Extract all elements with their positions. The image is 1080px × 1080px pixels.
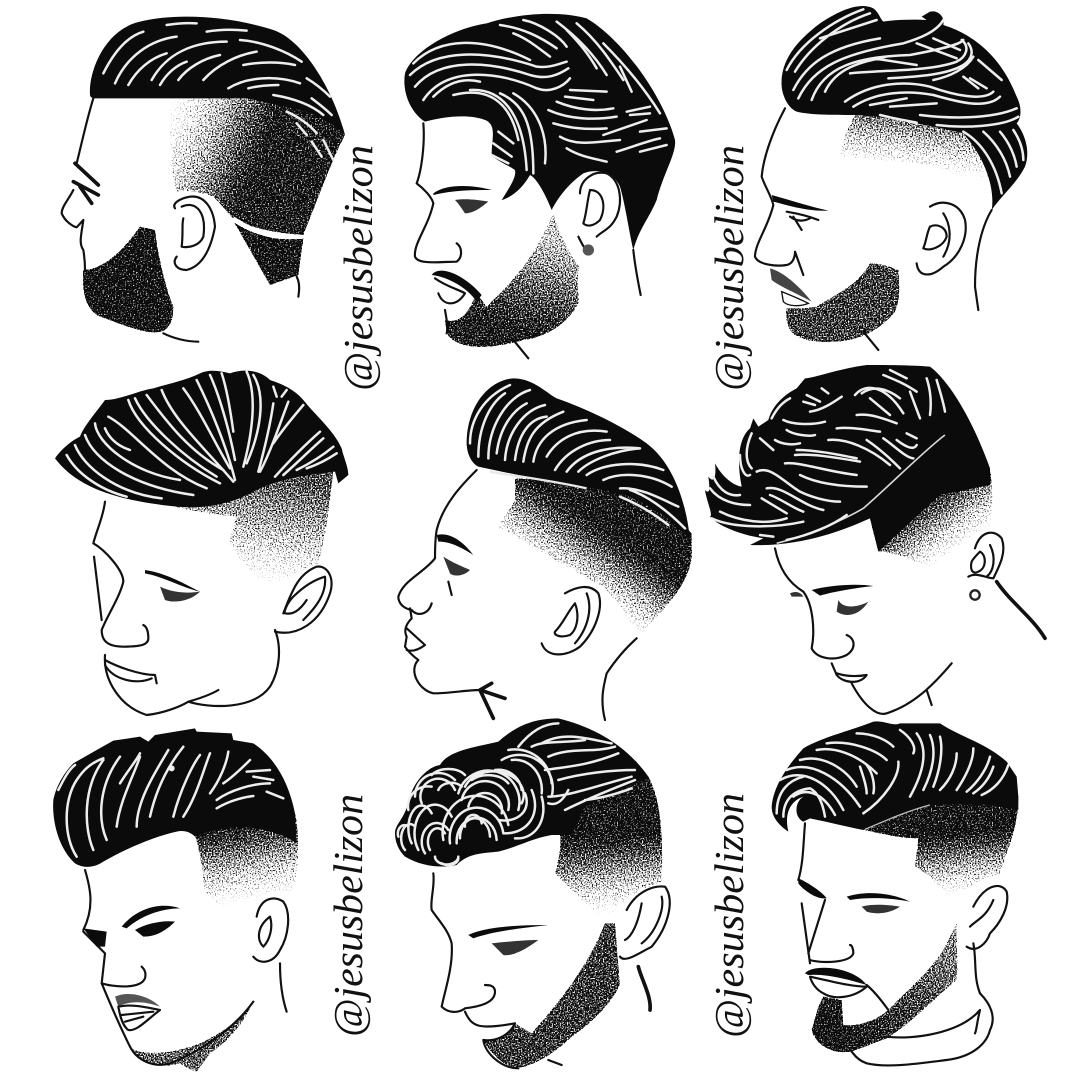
hair strands <box>67 372 337 498</box>
far brow <box>798 878 827 899</box>
hair: fade <box>173 472 333 583</box>
beard <box>812 923 957 1052</box>
hair strands <box>470 385 685 528</box>
hair highlight <box>169 765 175 771</box>
ear <box>620 886 670 959</box>
face outline <box>62 98 299 342</box>
hair: fade <box>498 478 692 638</box>
beard <box>83 227 173 333</box>
earring <box>970 590 980 600</box>
ear <box>917 203 966 274</box>
eye <box>837 600 868 615</box>
neck line <box>638 967 650 1010</box>
hair strands <box>58 747 283 857</box>
portrait 1: slick back with hard part and full beard <box>62 17 345 342</box>
eye <box>135 921 175 937</box>
hair: fade <box>195 813 298 920</box>
mouth <box>407 582 452 651</box>
brow <box>468 925 548 938</box>
part line <box>490 472 587 488</box>
hair: fade <box>555 777 662 920</box>
face outline <box>798 823 980 993</box>
hair: top <box>467 378 690 540</box>
portrait 9: swept-back hair, blocked hairline and full beard <box>772 721 1018 1065</box>
ear <box>275 567 331 633</box>
portrait 3: side-swept pompadour with undercut fade <box>755 6 1027 350</box>
brow <box>437 534 473 555</box>
moustache <box>805 968 867 985</box>
mouth <box>832 663 867 682</box>
moustache <box>432 271 482 302</box>
ear with earring <box>578 173 620 252</box>
portrait 7: raised pompadour with skin fade <box>53 728 298 1072</box>
moustache <box>115 994 160 1007</box>
eye <box>787 212 818 230</box>
hair: fade <box>863 797 1018 913</box>
hair strands <box>787 9 1023 193</box>
far brow <box>790 592 803 597</box>
beard <box>445 213 580 347</box>
neck spur <box>480 683 505 718</box>
portrait 2: voluminous wavy quiff with beard <box>404 14 675 358</box>
lips <box>810 977 888 1010</box>
portrait 8: curly top with fade and stubble <box>395 718 670 1068</box>
face outline <box>775 548 952 714</box>
portrait 4: forward-swept quiff with high fade <box>55 371 348 715</box>
watermark: bottom left: @jesusbelizon <box>325 794 371 1037</box>
hair: top <box>53 728 297 867</box>
portrait 6: textured tousled quiff with angled fade <box>705 365 1045 714</box>
hair <box>404 14 675 250</box>
hair: top <box>705 365 990 552</box>
part line <box>865 805 930 829</box>
brow <box>812 585 873 596</box>
eye <box>443 557 470 576</box>
eye <box>455 199 488 213</box>
ear <box>253 898 288 962</box>
face outline <box>83 870 287 1065</box>
hair: fade <box>840 115 991 200</box>
part line <box>777 435 945 543</box>
moustache <box>770 268 812 302</box>
hard part line <box>233 218 298 236</box>
collar <box>852 993 993 1065</box>
eye <box>160 587 200 602</box>
face outline <box>415 123 641 358</box>
watermark: top right: @jesusbelizon <box>706 145 752 391</box>
hair: top <box>55 371 348 507</box>
curls and strands <box>398 723 635 865</box>
brow <box>772 195 828 211</box>
eye <box>73 163 98 203</box>
beard <box>483 923 620 1068</box>
hair strands <box>710 370 945 540</box>
watermark: top left: @jesusbelizon <box>335 145 381 391</box>
ear <box>542 587 600 654</box>
hair strands <box>777 730 1008 817</box>
beard <box>786 263 899 342</box>
mouth <box>435 278 465 303</box>
eye <box>492 940 538 955</box>
face outline <box>431 873 562 1068</box>
brow <box>145 570 200 592</box>
far eye <box>83 928 107 947</box>
face outline <box>755 108 992 350</box>
brow <box>433 186 492 195</box>
hair: fade <box>870 435 992 567</box>
brow <box>847 893 910 902</box>
brow <box>122 906 180 928</box>
ear <box>967 886 1007 949</box>
ear <box>968 533 1003 578</box>
ear <box>174 197 215 270</box>
face outline <box>398 470 637 720</box>
watermark: bottom centre-right: @jesusbelizon <box>706 793 752 1038</box>
hair: top <box>395 718 648 867</box>
eye <box>862 905 900 913</box>
lower nape patch <box>234 223 303 285</box>
stubble <box>130 1002 253 1072</box>
hair: top <box>772 721 1018 832</box>
lips <box>782 292 808 306</box>
hair strands <box>410 20 667 173</box>
lips <box>118 1006 160 1030</box>
hair: fade <box>168 97 345 235</box>
hair: top <box>782 6 1027 210</box>
hair strands <box>103 23 333 160</box>
neck line <box>997 582 1045 638</box>
face outline <box>93 502 279 715</box>
mouth <box>105 660 157 683</box>
portrait 5: combed pompadour, profile <box>398 378 692 720</box>
hair: top <box>90 17 345 135</box>
